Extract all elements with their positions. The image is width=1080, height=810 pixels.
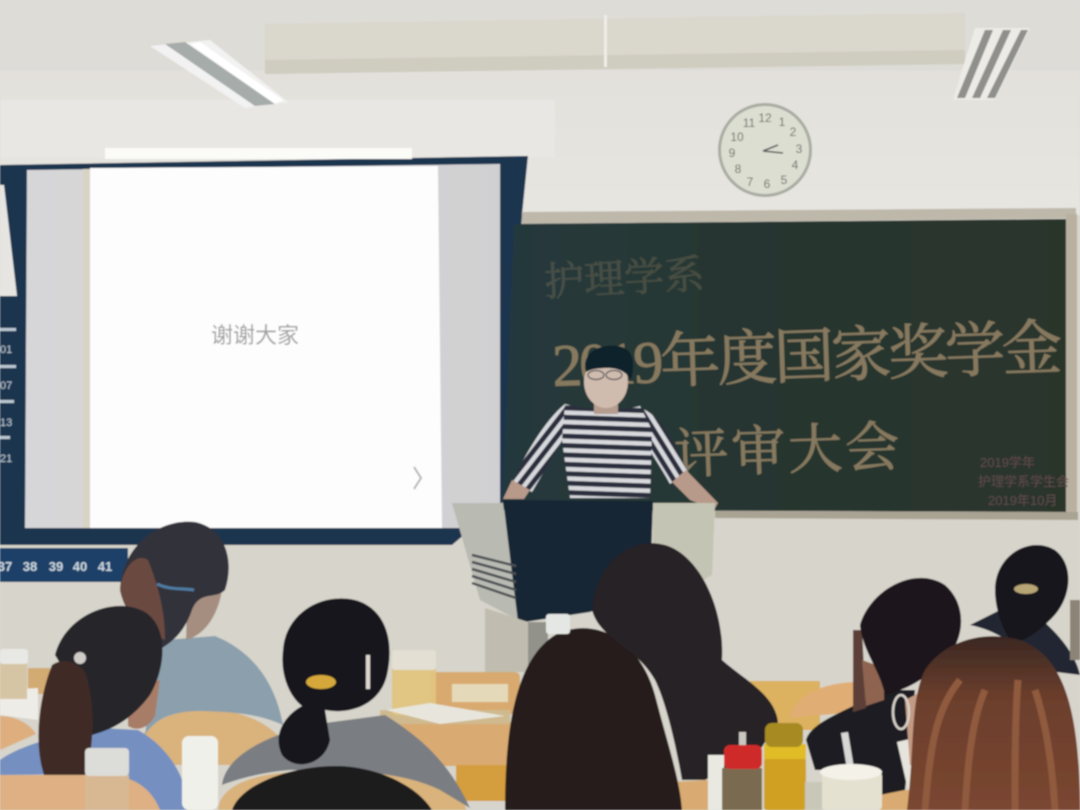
wall clock: 6 (764, 177, 771, 191)
speaker (503, 346, 718, 510)
small bottle cap behind audience (546, 614, 570, 634)
audience member: foreground right brown hair (893, 636, 1080, 810)
wall clock: 1 (779, 115, 786, 129)
speaker glasses (588, 370, 622, 380)
projection screen (25, 148, 500, 528)
wall clock: 8 (735, 162, 742, 176)
audience member: left ponytail blue shirt (0, 606, 188, 810)
white water bottle (85, 736, 218, 810)
wall clock: 11 (743, 116, 756, 130)
speaker arms (512, 404, 570, 492)
blackboard (502, 208, 1078, 520)
chalk heading: second line: 评审大会 (673, 417, 900, 485)
lectern vent (472, 555, 516, 598)
lectern (452, 500, 715, 672)
wall clock (718, 103, 812, 197)
ceiling lamp right (953, 28, 1030, 100)
lectern base (485, 608, 528, 672)
audience member: behind, black top (592, 543, 778, 780)
chalk heading: main title: 2019年度国家奖学金 (551, 315, 1063, 399)
slide next arrow (414, 467, 421, 489)
chalk heading: department: 护理学系 (543, 252, 705, 305)
white cup with straw (805, 732, 882, 810)
seat number strip: 41 (98, 559, 112, 574)
seat number strip: 38 (23, 559, 37, 574)
speaker neck and face (594, 394, 618, 414)
chalk small note: 2019年10月 (988, 493, 1057, 508)
chalk small note (978, 455, 1069, 508)
desks and chairs (0, 668, 910, 810)
papers on desk (386, 703, 505, 724)
ceiling lamp left (150, 40, 288, 108)
wall clock: 7 (747, 175, 754, 189)
speaker torso (562, 404, 652, 498)
audience member: centre with hair bun (222, 598, 470, 808)
audience head: bottom centre (232, 766, 432, 810)
yellow and red bottles (708, 723, 806, 810)
chalk small note: 护理学系学生会 (978, 474, 1069, 489)
side number list: 07 (0, 380, 12, 392)
screen bottom bar (0, 528, 452, 544)
seat number strip: 40 (73, 559, 87, 574)
seat number strip (0, 548, 128, 582)
projector frame (0, 156, 528, 545)
wall clock: 4 (792, 158, 799, 172)
audience member: right dark hair (806, 578, 961, 795)
ceiling duct (265, 13, 965, 74)
seat number strip: 39 (49, 559, 63, 574)
audience member: far left grey top (120, 522, 283, 735)
side number list: 21 (0, 453, 12, 465)
drink cup on desk (392, 650, 436, 715)
chalk small note: 2019学年 (980, 455, 1035, 470)
audience member: far right with hair clip (970, 545, 1080, 675)
side number list: 01 (0, 344, 12, 356)
jar at left edge (0, 649, 28, 699)
side number list: 13 (0, 417, 12, 429)
slide text: 谢谢大家 (211, 323, 299, 348)
speaker hair (585, 346, 633, 380)
wall clock: 2 (790, 125, 797, 139)
wall clock: 3 (796, 142, 803, 156)
audience member: centre long hair foreground (505, 628, 682, 810)
side number list (0, 328, 16, 465)
wall clock: 10 (730, 130, 744, 144)
wall clock: 12 (758, 111, 772, 125)
wall clock: 9 (729, 146, 736, 160)
wall clock: 5 (781, 173, 788, 187)
